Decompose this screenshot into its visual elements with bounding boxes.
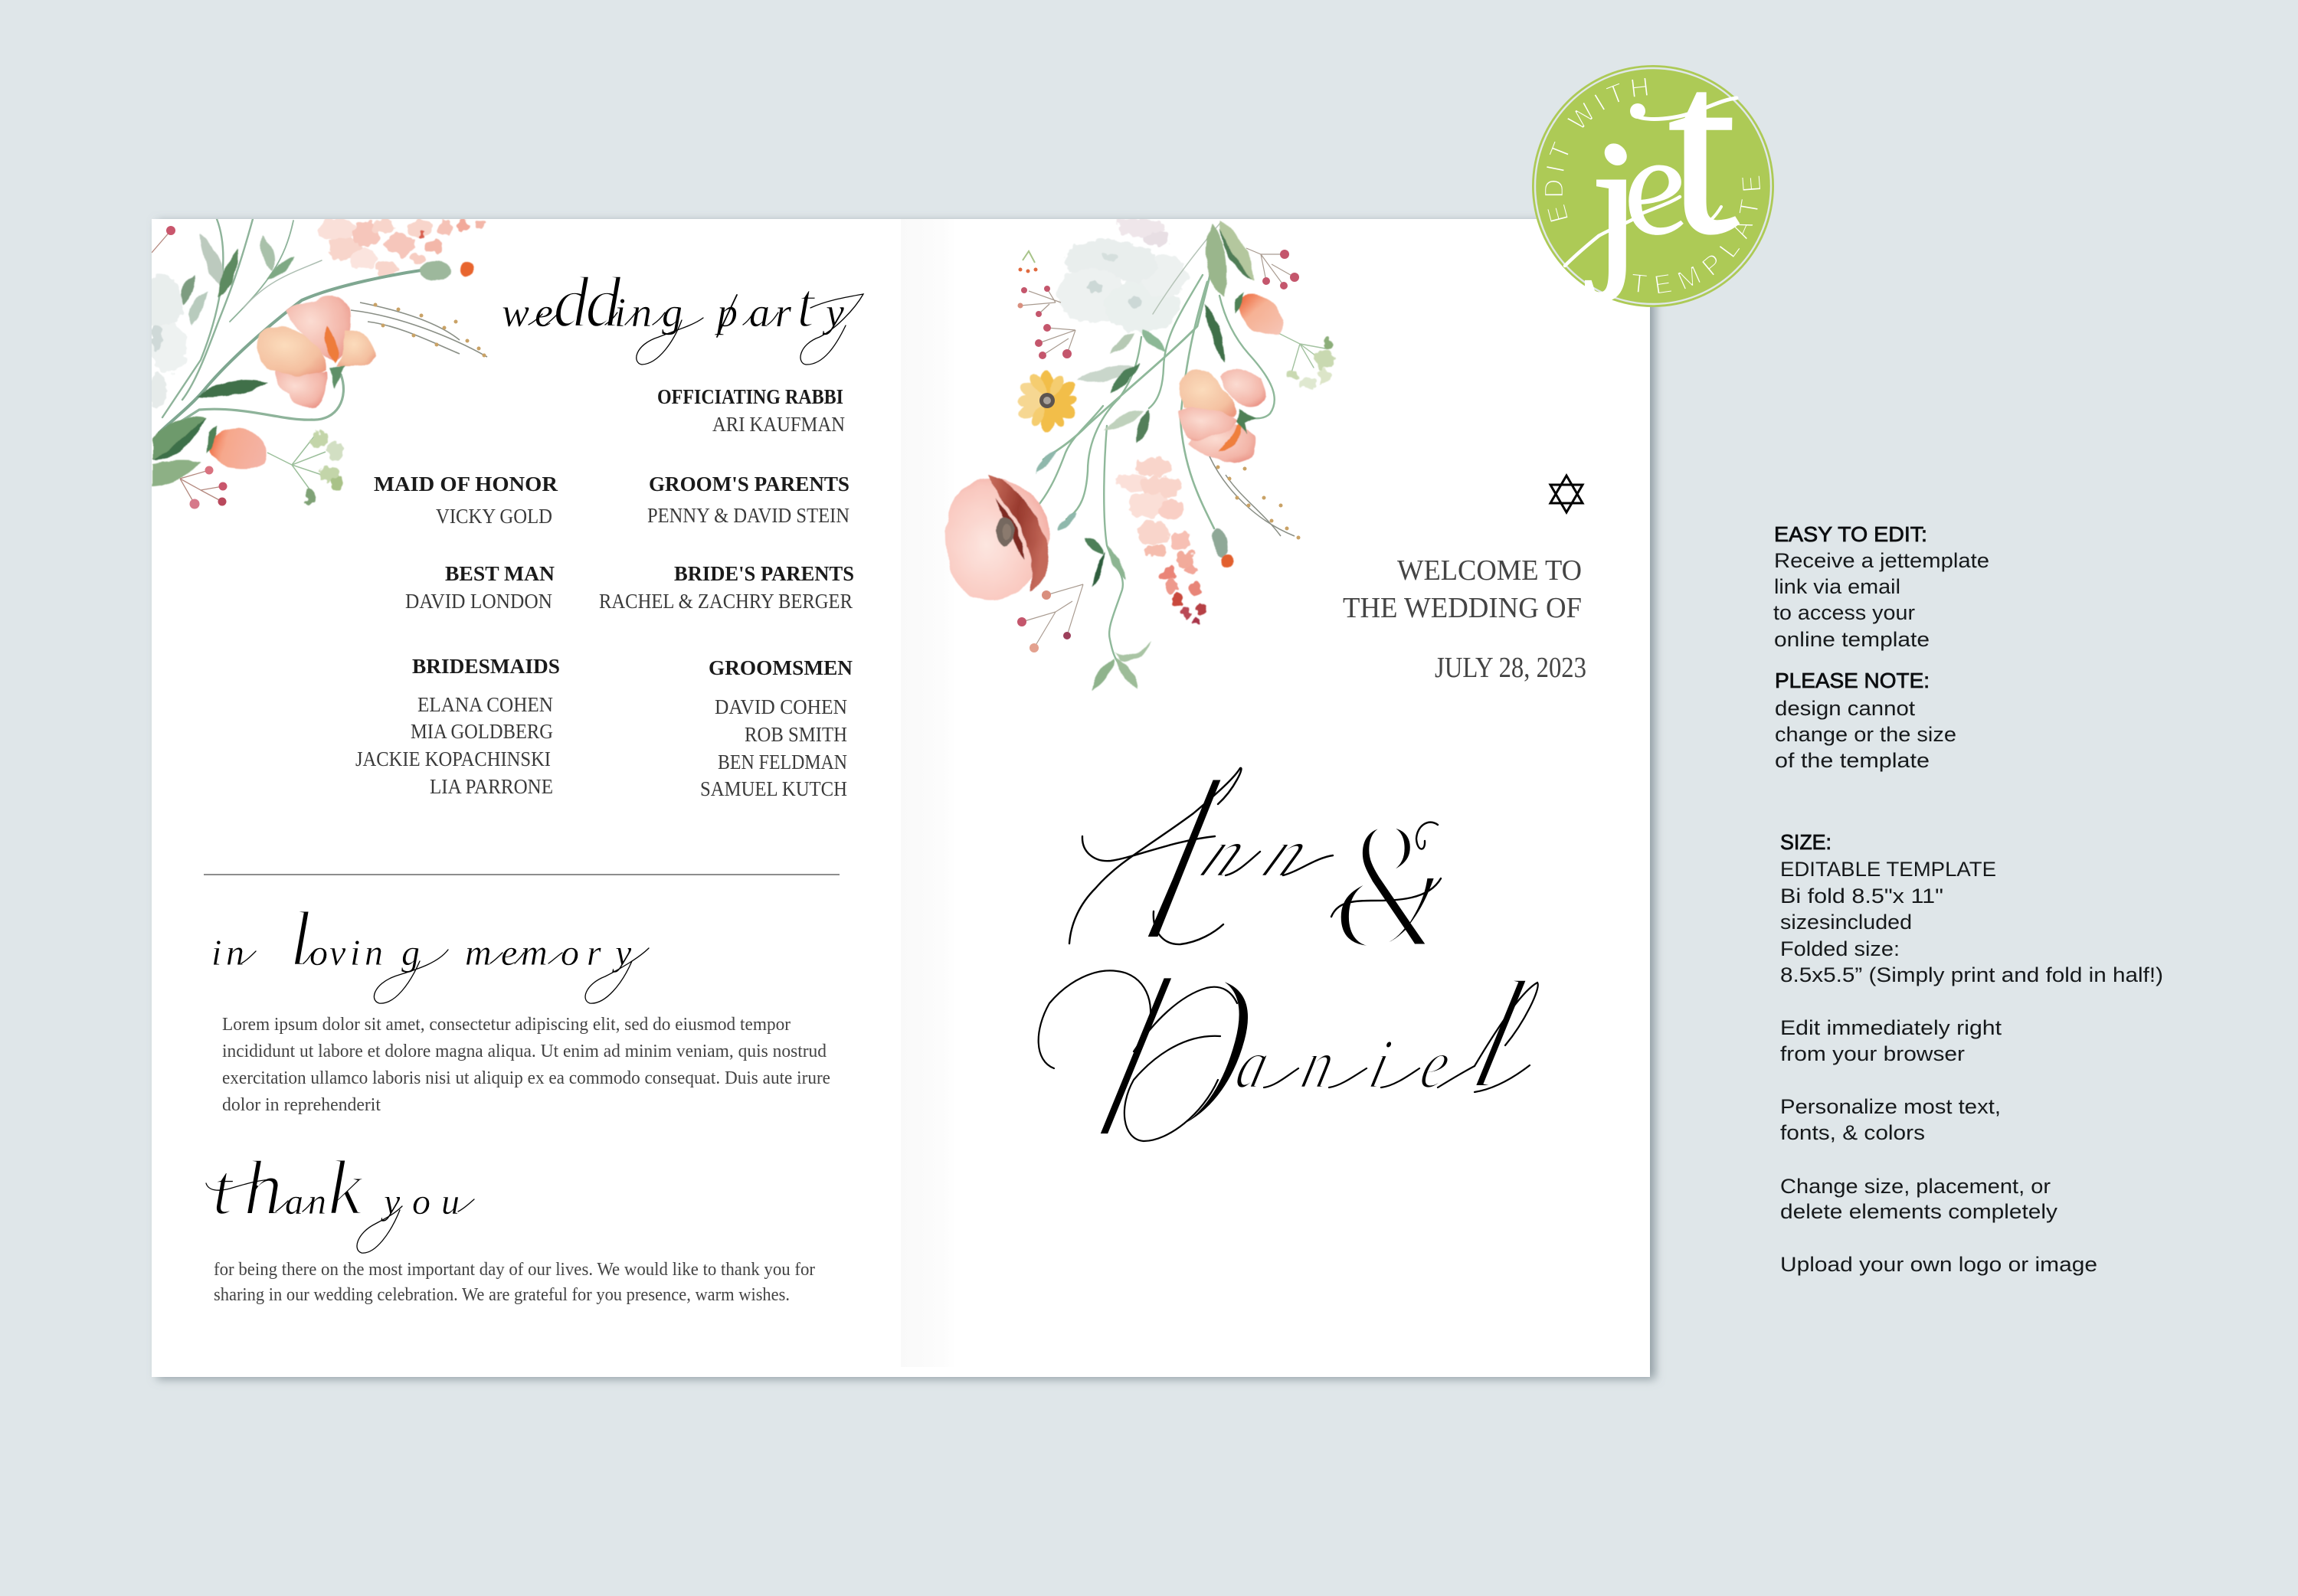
info block: please note: change or the size xyxy=(1775,723,1956,746)
info block: size: 8.5x5.5” (Simply print and fold in half!) xyxy=(1780,963,2163,986)
names: Ann and: A xyxy=(983,713,1311,1001)
floral: top-left corner bouquet xyxy=(142,217,487,509)
info block: personalize xyxy=(1780,1095,2001,1144)
text: date: JULY 28, 2023 xyxy=(1435,652,1586,684)
info block: size: SIZE: xyxy=(1780,830,1832,854)
text: memorial paragraph: incididunt ut labore et dolore magna aliqua. Ut enim ad minim veniam, quis nostrud xyxy=(222,1042,827,1061)
info block: please note: PLEASE NOTE: xyxy=(1775,669,1930,692)
white hydrangea xyxy=(1058,239,1187,332)
text: groom's parents xyxy=(647,473,849,527)
text: bridesmaids: ELANA COHEN xyxy=(417,693,553,716)
text: ampersand: & xyxy=(1331,780,1448,989)
text: groom's parents: PENNY & DAVID STEIN xyxy=(647,504,849,527)
poppy xyxy=(945,475,1049,600)
heading: thank you: t xyxy=(212,1148,234,1230)
logo: jet swashes xyxy=(1565,98,1737,266)
text: memorial paragraph: exercitation ullamco laboris nisi ut aliquip ex ea commodo consequat. Duis aute irure xyxy=(222,1068,830,1088)
heading: wedding party xyxy=(502,263,863,365)
info block: edit in browser: from your browser xyxy=(1780,1042,1965,1065)
text: maid of honor: VICKY GOLD xyxy=(436,505,552,528)
logo: curved text bottom: TEMPLATE xyxy=(1633,176,1760,293)
heading: thank you xyxy=(206,1145,474,1253)
heading: wedding party: we xyxy=(502,289,553,335)
info block: personalize: fonts, & colors xyxy=(1780,1121,1925,1144)
sweet pea flower xyxy=(257,296,378,408)
text: groomsmen: DAVID COHEN xyxy=(715,695,847,718)
white hydrangea xyxy=(152,273,187,409)
text: groomsmen: SAMUEL KUTCH xyxy=(700,777,847,800)
names: Daniel xyxy=(1039,910,1550,1199)
text: bridesmaids: LIA PARRONE xyxy=(430,775,553,798)
text: maid of honor: MAID OF HONOR xyxy=(374,473,558,495)
pink blossoms along top xyxy=(319,217,486,276)
text: bride's parents xyxy=(599,562,854,613)
text: groomsmen: BEN FELDMAN xyxy=(718,751,847,773)
closed bud at end of stem xyxy=(420,260,474,280)
text: bride's parents: RACHEL & ZACHRY BERGER xyxy=(599,590,853,613)
text: officiating rabbi: OFFICIATING RABBI xyxy=(657,385,843,408)
info block: change elements: delete elements completely xyxy=(1780,1200,2058,1223)
info block: personalize: Personalize most text, xyxy=(1780,1095,2001,1118)
names: Daniel: D xyxy=(1058,910,1288,1199)
heading: wedding party: ing par xyxy=(614,289,792,335)
info block: size: EDITABLE TEMPLATE xyxy=(1780,858,1996,881)
text: thank-you paragraph xyxy=(214,1260,815,1305)
text: welcome lines xyxy=(1343,554,1582,624)
info block: size: sizesincluded xyxy=(1780,911,1912,934)
text: best man: DAVID LONDON xyxy=(405,590,552,613)
info block: size: Bi fold 8.5"x 11" xyxy=(1780,885,1943,908)
panel: open program sheet xyxy=(152,219,1650,1377)
text: bridesmaids: MIA GOLDBERG xyxy=(411,720,553,743)
info block: edit in browser xyxy=(1780,1016,2002,1065)
leaves xyxy=(1035,221,1255,691)
info block: change elements xyxy=(1780,1175,2058,1223)
text: memorial paragraph: Lorem ipsum dolor sit amet, consectetur adipiscing elit, sed do eiusmod tempor xyxy=(222,1015,791,1035)
stems xyxy=(157,219,426,437)
info block: edit in browser: Edit immediately right xyxy=(1780,1016,2002,1039)
heading: wedding party: y xyxy=(822,289,844,335)
info block: easy to edit: EASY TO EDIT: xyxy=(1774,522,1927,546)
heading: thank you: h xyxy=(244,1145,283,1231)
names: Ann and: nn xyxy=(1187,813,1327,891)
info block: upload: Upload your own logo or image xyxy=(1780,1253,2097,1276)
text: bride's parents: BRIDE'S PARENTS xyxy=(674,562,854,585)
heading: in loving memory xyxy=(211,896,649,1003)
flourish: swashes xyxy=(1039,970,1538,1141)
umbel xyxy=(267,432,342,505)
heading: wedding party: dd xyxy=(553,263,622,342)
divider xyxy=(204,874,840,875)
text: maid of honor xyxy=(374,473,558,528)
text: best man xyxy=(405,562,555,613)
names: Daniel: anie xyxy=(1229,1025,1459,1104)
icon: star of david xyxy=(1550,476,1583,512)
heading: in loving memory: oving memory xyxy=(309,933,632,973)
names: Ann and xyxy=(983,713,1448,1001)
logo: jet wordmark: t xyxy=(1639,13,1764,284)
heading: thank you: an xyxy=(285,1182,326,1222)
text: welcome lines: THE WEDDING OF xyxy=(1343,592,1582,624)
leaves xyxy=(152,234,293,486)
tulip bud xyxy=(207,426,267,469)
info block: easy to edit: online template xyxy=(1774,628,1930,651)
yellow daisy xyxy=(1016,369,1078,432)
sweet pea flower xyxy=(1178,371,1265,463)
text: groomsmen xyxy=(700,656,853,800)
flourish: connecting hairlines and descender loops xyxy=(241,948,649,1003)
heading: in loving memory: l xyxy=(290,896,311,983)
info block: easy to edit xyxy=(1773,522,1989,651)
stems xyxy=(1036,222,1325,665)
heading: in loving memory: in xyxy=(211,933,285,973)
lilac blossom at top xyxy=(1117,217,1169,246)
text: bridesmaids xyxy=(355,655,560,798)
text: groom's parents: GROOM'S PARENTS xyxy=(649,473,849,495)
info block: size xyxy=(1780,830,2163,986)
logo badge: edit with jet template xyxy=(1532,13,1774,307)
closed bud xyxy=(1211,528,1235,568)
names: Daniel: l xyxy=(1458,948,1539,1122)
text: welcome lines: WELCOME TO xyxy=(1397,554,1582,587)
info block: easy to edit: link via email xyxy=(1774,575,1900,598)
info block: please note: design cannot xyxy=(1775,697,1916,720)
pink wisteria xyxy=(1115,458,1205,626)
info block: please note xyxy=(1775,669,1956,772)
info block: easy to edit: to access your xyxy=(1773,601,1915,624)
text: best man: BEST MAN xyxy=(445,562,555,585)
flourish: connecting hairlines and descender loops xyxy=(529,294,863,365)
tulip bud xyxy=(1235,293,1283,336)
heading: thank you: you xyxy=(375,1182,460,1222)
text: thank-you paragraph: for being there on the most important day of our lives. We would like to thank you for xyxy=(214,1260,815,1280)
seed spray xyxy=(1210,456,1301,539)
text: memorial paragraph xyxy=(222,1015,830,1115)
heading: thank you: k xyxy=(328,1145,364,1231)
text: groomsmen: ROB SMITH xyxy=(745,723,847,746)
logo: jet wordmark: e xyxy=(1606,104,1700,266)
seed spray xyxy=(351,303,487,357)
logo: curved text top: EDIT WITH xyxy=(1545,78,1648,222)
text: officiating rabbi: ARI KAUFMAN xyxy=(712,413,845,436)
text: memorial paragraph: dolor in reprehenderit xyxy=(222,1095,381,1115)
text: officiating rabbi xyxy=(657,385,845,436)
heading: wedding party: t xyxy=(797,270,817,341)
small pink buds xyxy=(152,226,227,509)
small berries xyxy=(1017,248,1299,652)
info block: easy to edit: Receive a jettemplate xyxy=(1774,549,1989,572)
info block: please note: of the template xyxy=(1775,749,1930,772)
text: bridesmaids: BRIDESMAIDS xyxy=(412,655,560,678)
flourish: swashes xyxy=(1069,768,1441,944)
floral: cover bouquet xyxy=(945,217,1336,691)
text: groomsmen: GROOMSMEN xyxy=(709,656,853,679)
flourish: descender loop and swash xyxy=(206,1179,474,1253)
logo: jet wordmark: j xyxy=(1552,105,1655,302)
text: thank-you paragraph: sharing in our wedding celebration. We are grateful for you presence, warm wishes. xyxy=(214,1285,790,1305)
text: bridesmaids: JACKIE KOPACHINSKI xyxy=(355,747,551,770)
info block: change elements: Change size, placement, or xyxy=(1780,1175,2051,1198)
info block: size: Folded size: xyxy=(1780,937,1900,960)
fold shading xyxy=(901,219,956,1367)
umbel xyxy=(1287,338,1336,389)
